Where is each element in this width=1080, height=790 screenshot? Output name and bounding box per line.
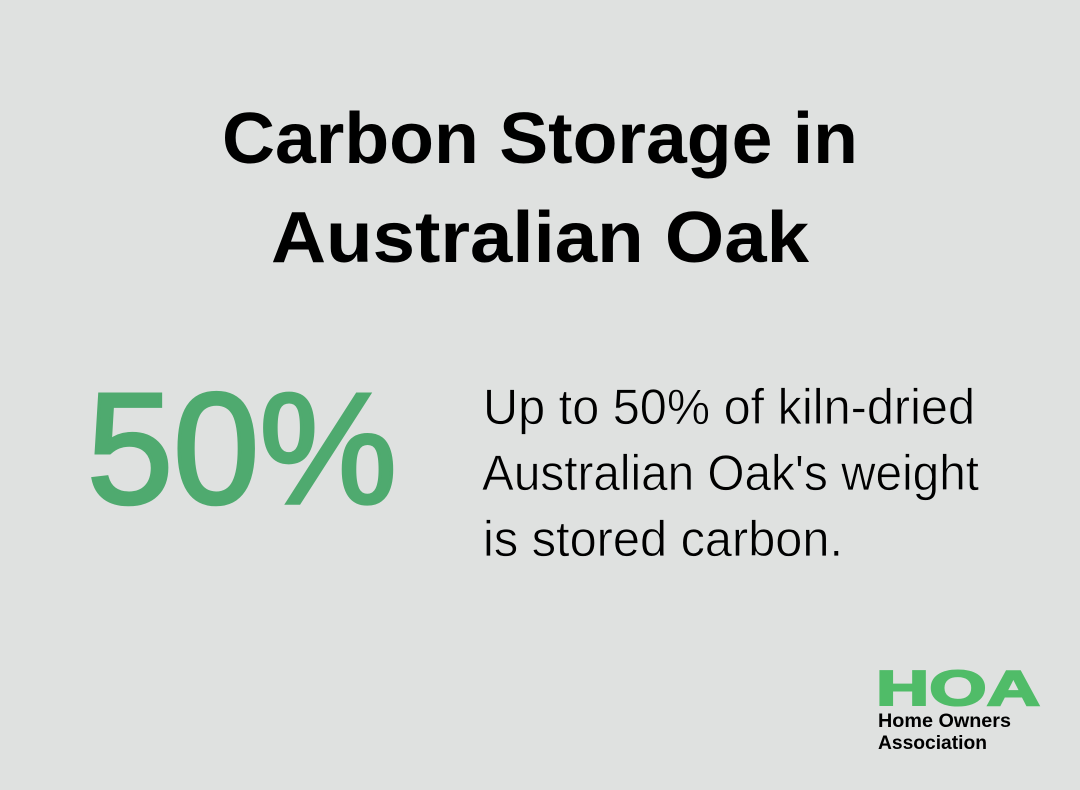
big statistic: 50%: 50%	[87, 361, 397, 537]
description text: is stored carbon.	[483, 511, 843, 567]
logo name	[878, 711, 1011, 754]
description text: Australian Oak's weight	[482, 445, 979, 501]
logo: Home Owners Association	[876, 662, 1040, 754]
logo mark: HOA: HOA	[876, 662, 1040, 716]
title: Carbon Storage in	[222, 99, 858, 179]
title: Australian Oak	[271, 198, 810, 278]
logo name: Home Owners	[878, 711, 1011, 732]
logo name: Association	[878, 733, 987, 754]
description text: Up to 50% of kiln-dried	[483, 379, 975, 435]
description text	[482, 379, 979, 567]
title	[222, 99, 858, 278]
